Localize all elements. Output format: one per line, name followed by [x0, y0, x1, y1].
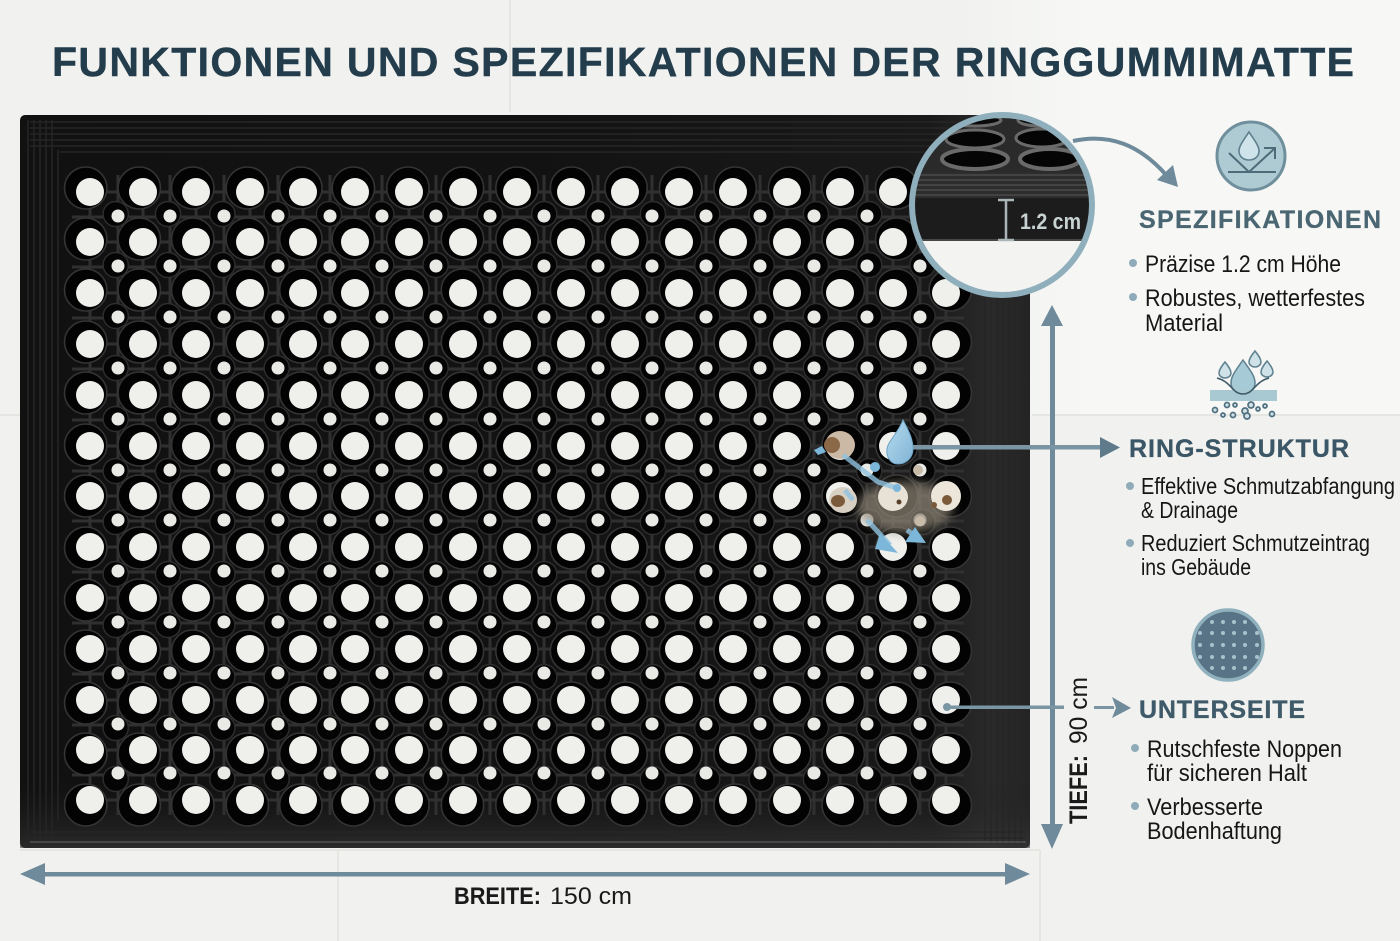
dimension arrow: depth: [1041, 305, 1063, 849]
curved arrow from lens to specifications: [1073, 139, 1178, 187]
icon: water drop on ring: [887, 420, 913, 464]
depth label: TIEFE:: [1065, 755, 1093, 824]
heading: ring structure: RING-STRUKTUR: [1129, 435, 1349, 463]
underside bullets: Rutschfeste Noppen: [1147, 736, 1342, 763]
width label: BREITE:: [454, 883, 541, 910]
specification bullets: [1129, 251, 1365, 337]
arrowheads of water flow: [814, 446, 926, 553]
ring structure bullets: ins Gebäude: [1141, 554, 1251, 580]
icon: anti-slip underside studs: [1193, 610, 1263, 680]
arrow: ring structure pointer: [905, 437, 1120, 458]
heading: underside: UNTERSEITE: [1139, 696, 1305, 724]
big see-through holes: [76, 178, 960, 814]
depth label: [1065, 677, 1093, 824]
icon: drainage layer with drops and dirt: [1210, 351, 1277, 419]
thickness marker: [998, 200, 1014, 240]
arrow: underside pointer: [943, 697, 1131, 718]
rubber ring mat photo: [20, 115, 1030, 848]
icon: water-resistant drop: [1217, 122, 1285, 190]
blue water flow arrows: [843, 455, 920, 545]
title: FUNKTIONEN UND SPEZIFIKATIONEN DER RINGGUMMIMATTE: [52, 39, 1354, 85]
dirt and water illustration on the mat: [824, 431, 961, 545]
specification bullets: Präzise 1.2 cm Höhe: [1145, 251, 1341, 278]
dimension arrow: width: [20, 863, 1030, 885]
lattice bridges between holes: [72, 175, 964, 815]
big hole rims: [65, 167, 971, 826]
underside bullets: Bodenhaftung: [1147, 818, 1282, 845]
specification bullets: Robustes, wetterfestes: [1145, 285, 1365, 312]
magnifier lens: mat thickness: [905, 110, 1100, 302]
ring structure bullets: [1126, 473, 1395, 580]
ring structure bullets: Reduziert Schmutzeintrag: [1141, 530, 1370, 556]
small see-through holes: [112, 210, 926, 780]
thickness value: 1.2 cm: [1020, 209, 1081, 234]
depth label: 90 cm: [1065, 677, 1093, 744]
width label: 150 cm: [550, 883, 632, 910]
underside bullets: für sicheren Halt: [1147, 760, 1307, 787]
underside bullets: Verbesserte: [1147, 794, 1263, 821]
specification bullets: Material: [1145, 310, 1223, 337]
underside bullets: [1131, 736, 1342, 845]
small hole rims: [103, 202, 935, 792]
heading: specifications: SPEZIFIKATIONEN: [1139, 206, 1381, 234]
ring structure bullets: & Drainage: [1141, 497, 1238, 523]
